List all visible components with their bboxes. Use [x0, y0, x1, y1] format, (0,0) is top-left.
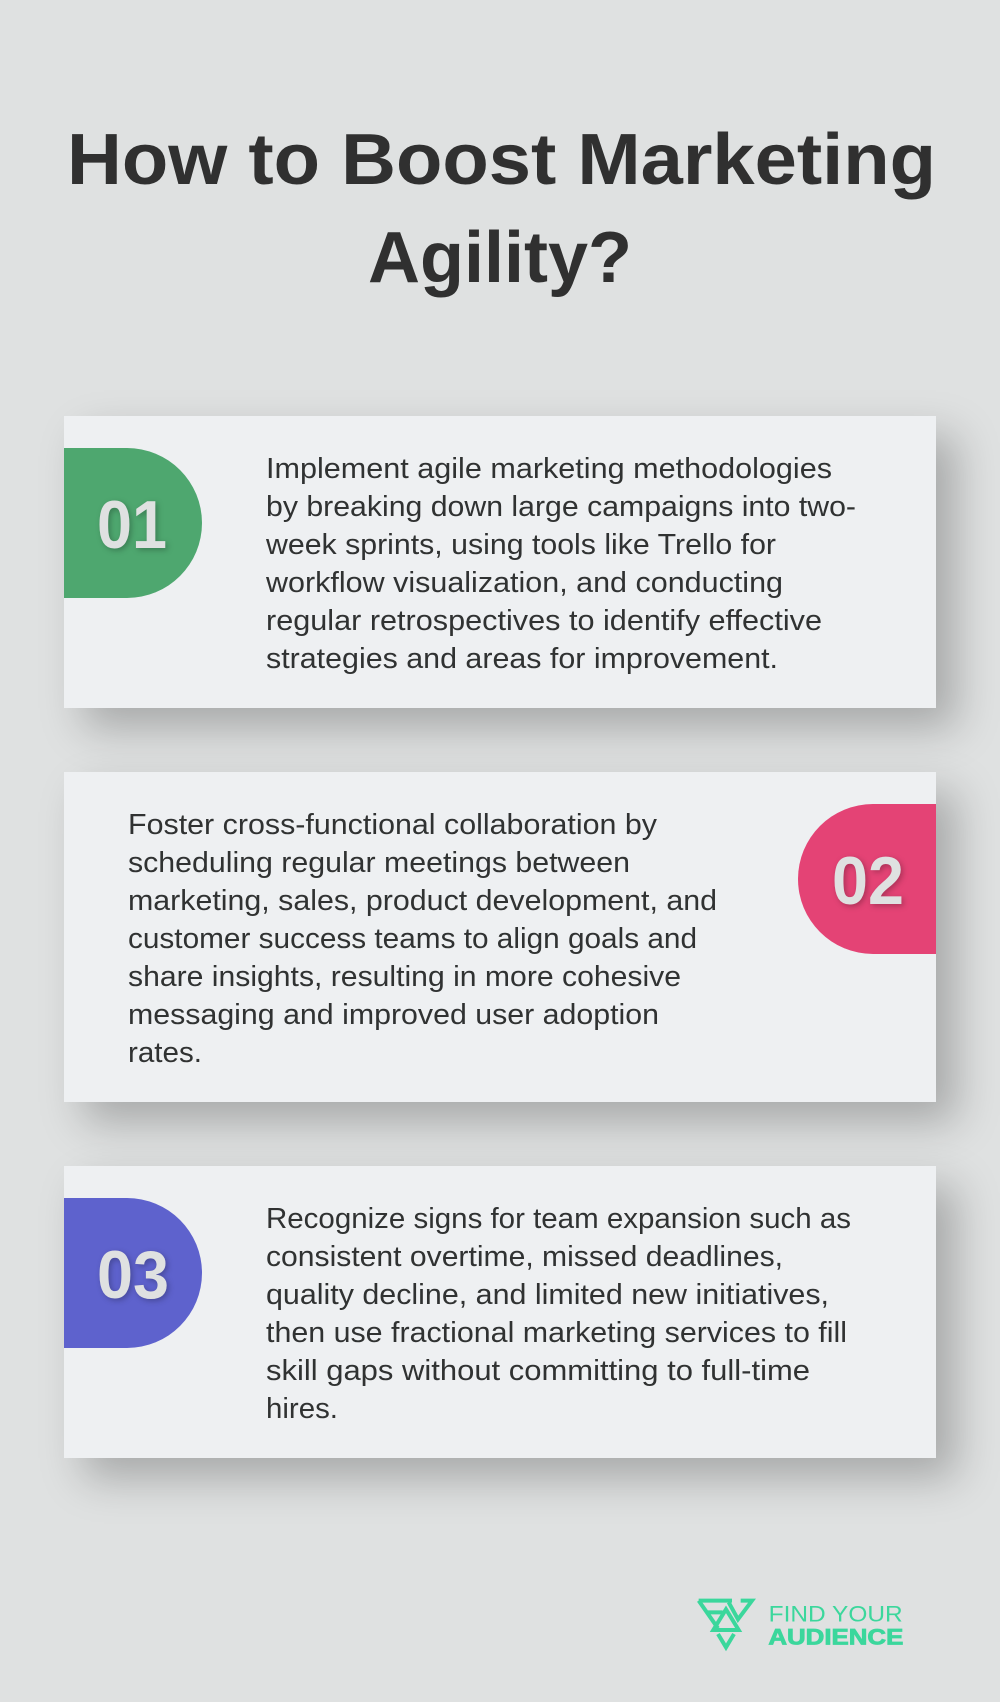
text: step 02 description: Foster cross-functional collaboration by [128, 809, 658, 841]
wordmark [768, 1602, 903, 1649]
text: step 02 description [128, 809, 717, 1069]
logo: Find Your Audience [699, 1601, 903, 1649]
title: How to Boost Marketing [67, 120, 936, 200]
title [67, 120, 936, 298]
title: Agility? [368, 218, 632, 298]
wordmark: FIND YOUR [769, 1602, 903, 1627]
text: step 01 description: Implement agile marketing methodologies [266, 453, 832, 485]
number 03: 03 [97, 1237, 169, 1313]
text: step 02 description: customer success teams to align goals and [128, 923, 697, 955]
text: step 03 description: consistent overtime, missed deadlines, [266, 1241, 783, 1273]
panel: step 03 [64, 1166, 936, 1458]
badge: 01 [64, 448, 202, 598]
text: step 03 description [266, 1203, 851, 1425]
text: step 01 description: by breaking down large campaigns into two- [266, 491, 856, 523]
badge: 03 [64, 1198, 202, 1348]
icon: triangle mark [699, 1601, 752, 1647]
number 02: 02 [832, 843, 904, 919]
text: step 01 description [265, 453, 856, 675]
badge: 02 [798, 804, 936, 954]
text: step 03 description: skill gaps without committing to full-time [266, 1355, 810, 1387]
panel: step 02 [64, 772, 936, 1102]
text: step 03 description: quality decline, and limited new initiatives, [266, 1279, 829, 1311]
text: step 02 description: messaging and improved user adoption [128, 999, 659, 1031]
text: step 02 description: share insights, resulting in more cohesive [128, 961, 681, 993]
text: step 01 description: regular retrospectives to identify effective [266, 605, 822, 637]
text: step 03 description: hires. [266, 1393, 338, 1425]
text: step 01 description: week sprints, using tools like Trello for [265, 529, 777, 561]
wordmark: AUDIENCE [768, 1624, 903, 1649]
text: step 01 description: strategies and areas for improvement. [266, 643, 778, 675]
text: step 02 description: marketing, sales, product development, and [128, 885, 717, 917]
text: step 03 description: then use fractional marketing services to fill [266, 1317, 847, 1349]
text: step 02 description: scheduling regular meetings between [128, 847, 630, 879]
number 01: 01 [97, 487, 167, 563]
text: step 03 description: Recognize signs for team expansion such as [266, 1203, 851, 1235]
text: step 02 description: rates. [128, 1037, 202, 1069]
text: step 01 description: workflow visualization, and conducting [265, 567, 783, 599]
panel: step 01 [64, 416, 936, 708]
